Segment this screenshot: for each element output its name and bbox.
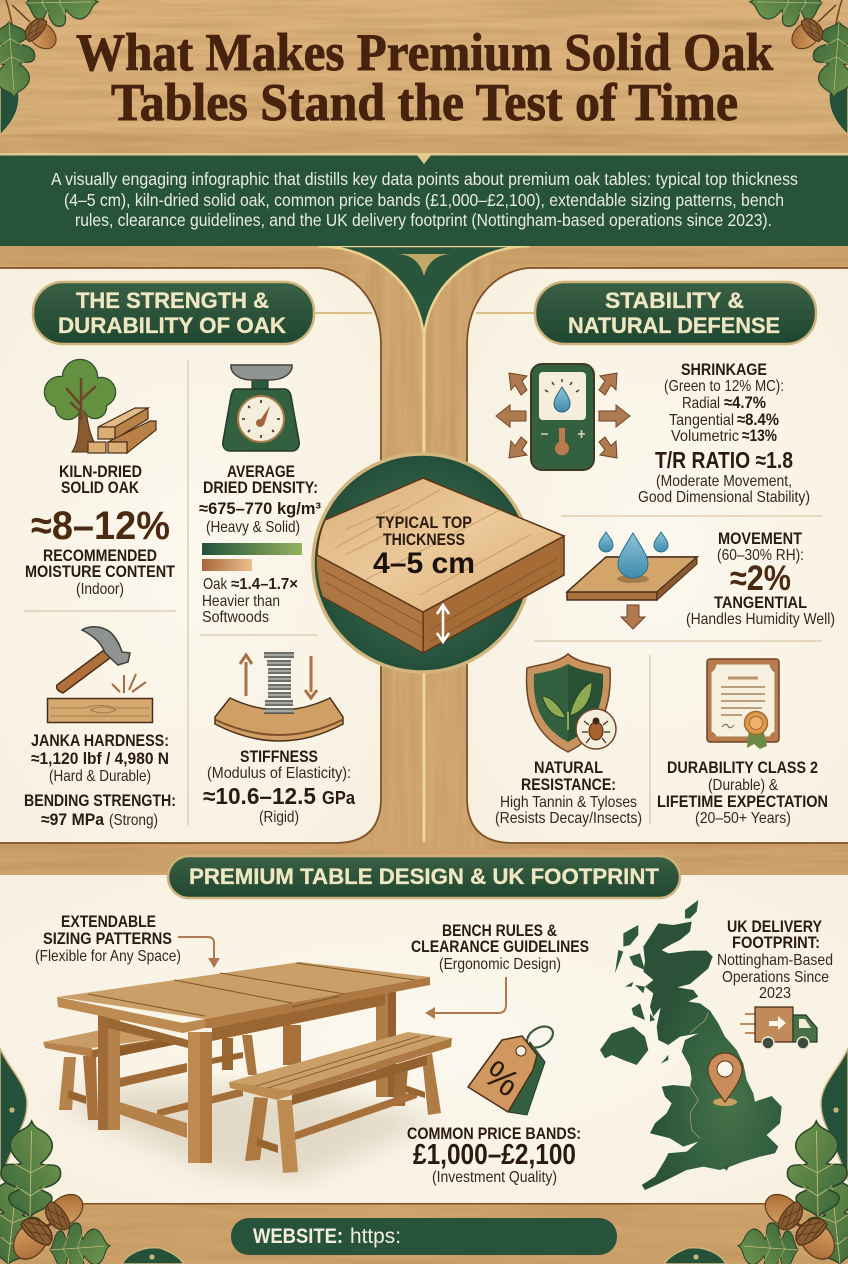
gold ornament — [396, 254, 452, 276]
text: janka hardness and bending strength: ≈1,120 lbf / 4,980 N — [31, 749, 169, 768]
text: janka hardness and bending strength: (Hard & Durable) — [49, 768, 151, 785]
icon: shield with leaf and beetle — [526, 654, 616, 752]
heading: stability and natural defense: STABILITY & — [605, 288, 744, 313]
right bench — [229, 1032, 452, 1173]
text: shrinkage and T/R ratio: ≈13% — [742, 426, 777, 445]
text: janka hardness and bending strength — [24, 731, 176, 829]
table — [57, 962, 430, 1163]
arrow: to table top — [178, 937, 220, 968]
center medallion: typical top thickness — [313, 454, 564, 672]
text: stiffness: (Rigid) — [259, 809, 299, 826]
panel: strength and durability background — [0, 268, 381, 843]
text: shrinkage and T/R ratio — [638, 360, 810, 506]
text: shrinkage and T/R ratio: (Green to 12% MC): — [664, 378, 784, 395]
text: oak heavier than softwoods: ≈1.4–1.7× — [231, 576, 298, 593]
text: UK delivery footprint: FOOTPRINT: — [732, 933, 820, 952]
text: bench rules and clearance — [411, 921, 589, 973]
text: janka hardness and bending strength: JANKA HARDNESS: — [31, 731, 169, 750]
text: thickness: TYPICAL TOP — [376, 514, 472, 532]
text: natural resistance: (Resists Decay/Insects) — [495, 810, 642, 827]
text: janka hardness and bending strength: BENDING STRENGTH: — [24, 791, 176, 810]
text: natural resistance: NATURAL — [534, 758, 603, 777]
title: Tables Stand the Test of Time — [111, 74, 738, 132]
text: shrinkage and T/R ratio: Tangential — [669, 412, 734, 429]
text: shrinkage and T/R ratio: ≈8.4% — [737, 410, 779, 429]
text: stiffness: (Modulus of Elasticity): — [207, 765, 351, 782]
text: shrinkage and T/R ratio: (Moderate Movement, — [656, 473, 792, 490]
heading: stability and natural defense: NATURAL DEFENSE — [568, 313, 780, 338]
text: shrinkage and T/R ratio: Volumetric — [671, 428, 739, 445]
text: average dried density: (Heavy & Solid) — [206, 519, 300, 536]
text: average dried density — [199, 462, 321, 536]
corner: oak leaves bottom left — [0, 1048, 184, 1264]
text: janka hardness and bending strength: (Strong) — [109, 812, 158, 829]
text: shrinkage and T/R ratio: Good Dimensional Stability) — [638, 489, 810, 506]
text: durability class and lifetime — [657, 758, 828, 827]
text: kiln-dried solid oak: RECOMMENDED — [43, 546, 157, 565]
title — [76, 24, 773, 132]
corner: oak leaves top left — [0, 0, 98, 135]
text: common price bands — [407, 1124, 581, 1186]
text: oak heavier than softwoods: Softwoods — [202, 609, 269, 626]
text: extendable sizing patterns: SIZING PATTERNS — [43, 929, 172, 948]
title banner — [0, 0, 848, 154]
text: shrinkage and T/R ratio: T/R RATIO ≈1.8 — [655, 447, 793, 473]
text: extendable sizing patterns: EXTENDABLE — [61, 912, 156, 931]
text: shrinkage and T/R ratio: Radial — [682, 395, 720, 412]
chart: oak versus softwood density bars — [202, 543, 302, 571]
heading: stability and natural defense — [535, 282, 816, 344]
heading: premium table design — [168, 856, 680, 898]
text: natural resistance: High Tannin & Tyloses — [500, 794, 637, 811]
text: UK delivery footprint: UK DELIVERY — [727, 917, 823, 936]
footer wood band — [0, 1203, 848, 1264]
illustration: oak table and benches — [43, 962, 452, 1180]
text: bench rules and clearance: (Ergonomic Design) — [439, 956, 561, 973]
icon: oak slab — [317, 478, 564, 653]
text: kiln-dried solid oak — [25, 462, 176, 598]
icon: water drops on oak board — [567, 532, 697, 629]
website pill: WEBSITE: — [253, 1225, 343, 1248]
icon: delivery truck — [740, 1007, 817, 1049]
description band: (4–5 cm), kiln-dried solid oak, common price bands (£1,000–£2,100), extendable sizing patterns, bench — [64, 190, 784, 210]
heading: strength and durability: THE STRENGTH & — [76, 288, 269, 313]
website pill — [231, 1218, 617, 1255]
heading: strength and durability — [33, 282, 534, 344]
text: natural resistance — [495, 758, 642, 827]
text: average dried density: DRIED DENSITY: — [203, 478, 318, 497]
icon: moisture meter with arrows — [496, 364, 630, 470]
left bench — [43, 1028, 257, 1120]
heading: premium table design: PREMIUM TABLE DESIGN & UK FOOTPRINT — [189, 864, 659, 889]
text: movement: MOVEMENT — [718, 529, 803, 548]
text: average dried density: AVERAGE — [227, 462, 295, 481]
wood frame — [0, 240, 848, 876]
text: common price bands: £1,000–£2,100 — [413, 1139, 576, 1171]
text: shrinkage and T/R ratio: SHRINKAGE — [681, 360, 767, 379]
text: oak heavier than softwoods: Oak — [203, 576, 228, 593]
map: United Kingdom — [600, 900, 782, 1190]
text: movement: (60–30% RH): — [717, 547, 804, 564]
text: kiln-dried solid oak: (Indoor) — [76, 581, 124, 598]
text: bench rules and clearance: CLEARANCE GUIDELINES — [411, 937, 589, 956]
description band: rules, clearance guidelines, and the UK delivery footprint (Nottingham-based operations since 2023). — [75, 210, 772, 230]
icon: durability certificate — [707, 659, 779, 749]
text: kiln-dried solid oak: ≈8–12% — [31, 504, 170, 548]
text: shrinkage and T/R ratio: ≈4.7% — [724, 393, 766, 412]
website pill: https: — [350, 1225, 401, 1248]
text: common price bands: COMMON PRICE BANDS: — [407, 1124, 581, 1143]
text: durability class and lifetime: (Durable) & — [708, 777, 778, 794]
text: oak heavier than softwoods: Heavier than — [202, 593, 280, 610]
text: stiffness: GPa — [322, 788, 356, 808]
icon: price tag: % — [476, 1052, 527, 1105]
text: UK delivery footprint — [717, 917, 833, 1002]
text: UK delivery footprint: 2023 — [759, 985, 791, 1002]
text: oak heavier than softwoods — [202, 576, 298, 626]
text: natural resistance: RESISTANCE: — [521, 775, 616, 794]
text: janka hardness and bending strength: ≈97 MPa — [41, 810, 105, 829]
arrow: to bench — [425, 977, 506, 1019]
icon: weighing scale — [223, 365, 299, 451]
description band — [0, 153, 848, 246]
text: movement — [686, 529, 835, 628]
corner: oak leaves top right — [750, 0, 848, 135]
text: durability class and lifetime: (20–50+ Years) — [695, 810, 791, 827]
text: common price bands: (Investment Quality) — [432, 1169, 557, 1186]
text: UK delivery footprint: Nottingham-Based — [717, 952, 833, 969]
green wedge between wood arms — [318, 246, 530, 338]
text: UK delivery footprint: Operations Since — [722, 969, 829, 986]
text: kiln-dried solid oak: SOLID OAK — [61, 478, 140, 497]
corner: oak leaves bottom right — [664, 1048, 848, 1264]
text: stiffness — [203, 747, 356, 826]
title: What Makes Premium Solid Oak — [76, 24, 773, 82]
text: thickness: 4–5 cm — [373, 547, 475, 580]
text: thickness — [373, 514, 475, 580]
bottom section background — [0, 875, 848, 1204]
text: bench rules and clearance: BENCH RULES & — [442, 921, 557, 940]
text: stiffness: STIFFNESS — [240, 747, 318, 766]
text: durability class and lifetime: DURABILITY CLASS 2 — [667, 758, 818, 777]
text: kiln-dried solid oak: KILN-DRIED — [59, 462, 142, 481]
panel: stability and defense background — [467, 268, 848, 843]
text: movement: ≈2% — [730, 559, 791, 598]
text: movement: TANGENTIAL — [714, 593, 807, 612]
icon: price tag — [468, 1022, 557, 1115]
text: average dried density: ≈675–770 kg/m³ — [199, 499, 321, 518]
text: thickness: THICKNESS — [383, 531, 465, 549]
icon: hammer on oak plank — [48, 627, 152, 722]
text: stiffness: ≈10.6–12.5 — [203, 783, 316, 809]
icon: spring on bending beam — [215, 655, 343, 741]
heading: strength and durability: DURABILITY OF OAK — [58, 313, 287, 338]
text: extendable sizing patterns: (Flexible for Any Space) — [35, 948, 181, 965]
icon: location pin Nottingham — [708, 1053, 742, 1106]
icon: tree and stacked lumber — [45, 360, 156, 453]
text: extendable sizing patterns — [35, 912, 181, 965]
text: kiln-dried solid oak: MOISTURE CONTENT — [25, 562, 176, 581]
